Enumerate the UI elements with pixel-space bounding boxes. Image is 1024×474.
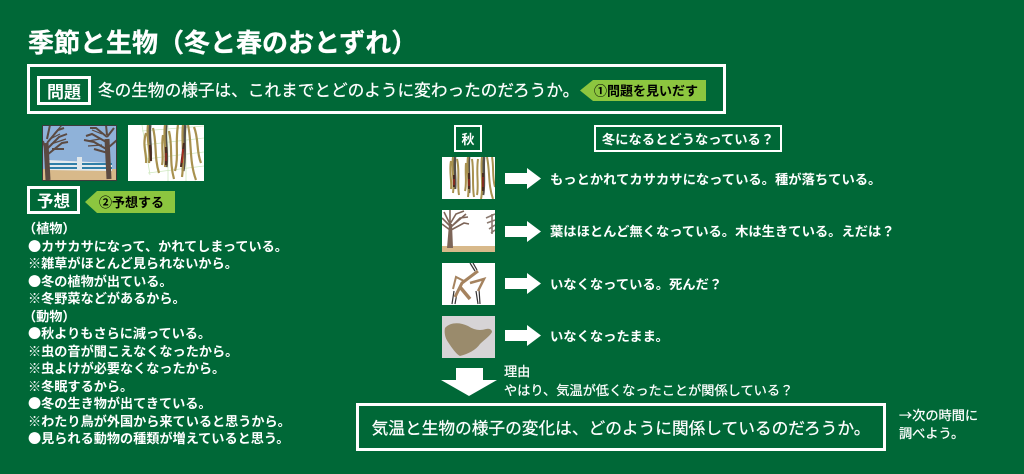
prediction list: ●冬の植物が出ている。 <box>28 271 173 290</box>
winter result: mantis: いなくなっている。死んだ？ <box>550 274 722 293</box>
arrow <box>505 273 541 294</box>
prediction list: ●見られる動物の種類が増えていると思う。 <box>28 428 289 447</box>
image: withered plants autumn <box>442 157 495 199</box>
arrow <box>505 168 541 189</box>
next-time note: 調べよう。 <box>899 423 964 442</box>
callout: make a prediction <box>85 191 175 213</box>
winter result: egg case: いなくなったまま。 <box>550 326 669 345</box>
reason text: やはり、気温が低くなったことが関係している？ <box>504 380 793 399</box>
next-time note: →次の時間に <box>899 405 978 424</box>
prediction list: ●カサカサになって、かれてしまっている。 <box>28 236 288 255</box>
winter column heading: 冬になるとどうなっている？ <box>602 129 774 148</box>
photo: withered plants <box>128 125 204 181</box>
arrow <box>505 325 541 346</box>
arrow <box>505 221 541 242</box>
panel: next question: 気温と生物の様子の変化は、どのように関係しているのだろうか。 <box>372 415 870 439</box>
prediction list: （植物） <box>23 218 76 237</box>
winter result: plants: もっとかれてカサカサになっている。種が落ちている。 <box>550 169 881 188</box>
problem label <box>37 76 91 105</box>
prediction list: ※冬野菜などがあるから。 <box>28 288 186 307</box>
reason text <box>504 361 793 399</box>
prediction list: ●秋よりもさらに減っている。 <box>28 323 211 342</box>
prediction list: ※冬眠するから。 <box>28 376 133 395</box>
autumn column heading <box>454 125 482 152</box>
autumn column heading: 秋 <box>461 129 474 148</box>
prediction list: ※虫の音が聞こえなくなったから。 <box>28 341 238 360</box>
reason text: 理由 <box>504 361 530 380</box>
winter result: tree: 葉はほとんど無くなっている。木は生きている。えだは？ <box>550 221 895 240</box>
down arrow <box>441 368 497 396</box>
prediction list: （動物） <box>23 306 76 325</box>
problem label: 問題 <box>47 78 81 103</box>
prediction label <box>27 186 80 214</box>
problem text: 冬の生物の様子は、これまでとどのように変わったのだろうか。 <box>98 77 579 101</box>
winter column heading <box>594 125 782 152</box>
image: bare tree <box>442 210 495 252</box>
prediction list: ※虫よけが必要なくなったから。 <box>28 358 225 377</box>
prediction label: 予想 <box>37 188 70 212</box>
prediction list: ※わたり鳥が外国から来ていると思うから。 <box>28 411 291 430</box>
title: 季節と生物（冬と春のおとずれ） <box>28 23 417 60</box>
image: praying mantis <box>442 263 495 305</box>
callout: find the problem: ①問題を見いだす <box>594 80 698 100</box>
callout: make a prediction: ②予想する <box>99 192 164 211</box>
panel: next question <box>356 403 886 451</box>
prediction list: ●冬の生き物が出てきている。 <box>28 393 212 412</box>
panel: problem <box>27 64 726 114</box>
prediction list <box>23 218 291 447</box>
prediction list: ※雑草がほとんど見られないから。 <box>28 253 238 272</box>
photo: schoolyard with bare trees <box>42 125 117 181</box>
image: egg case <box>442 316 495 358</box>
next-time note <box>899 405 978 442</box>
